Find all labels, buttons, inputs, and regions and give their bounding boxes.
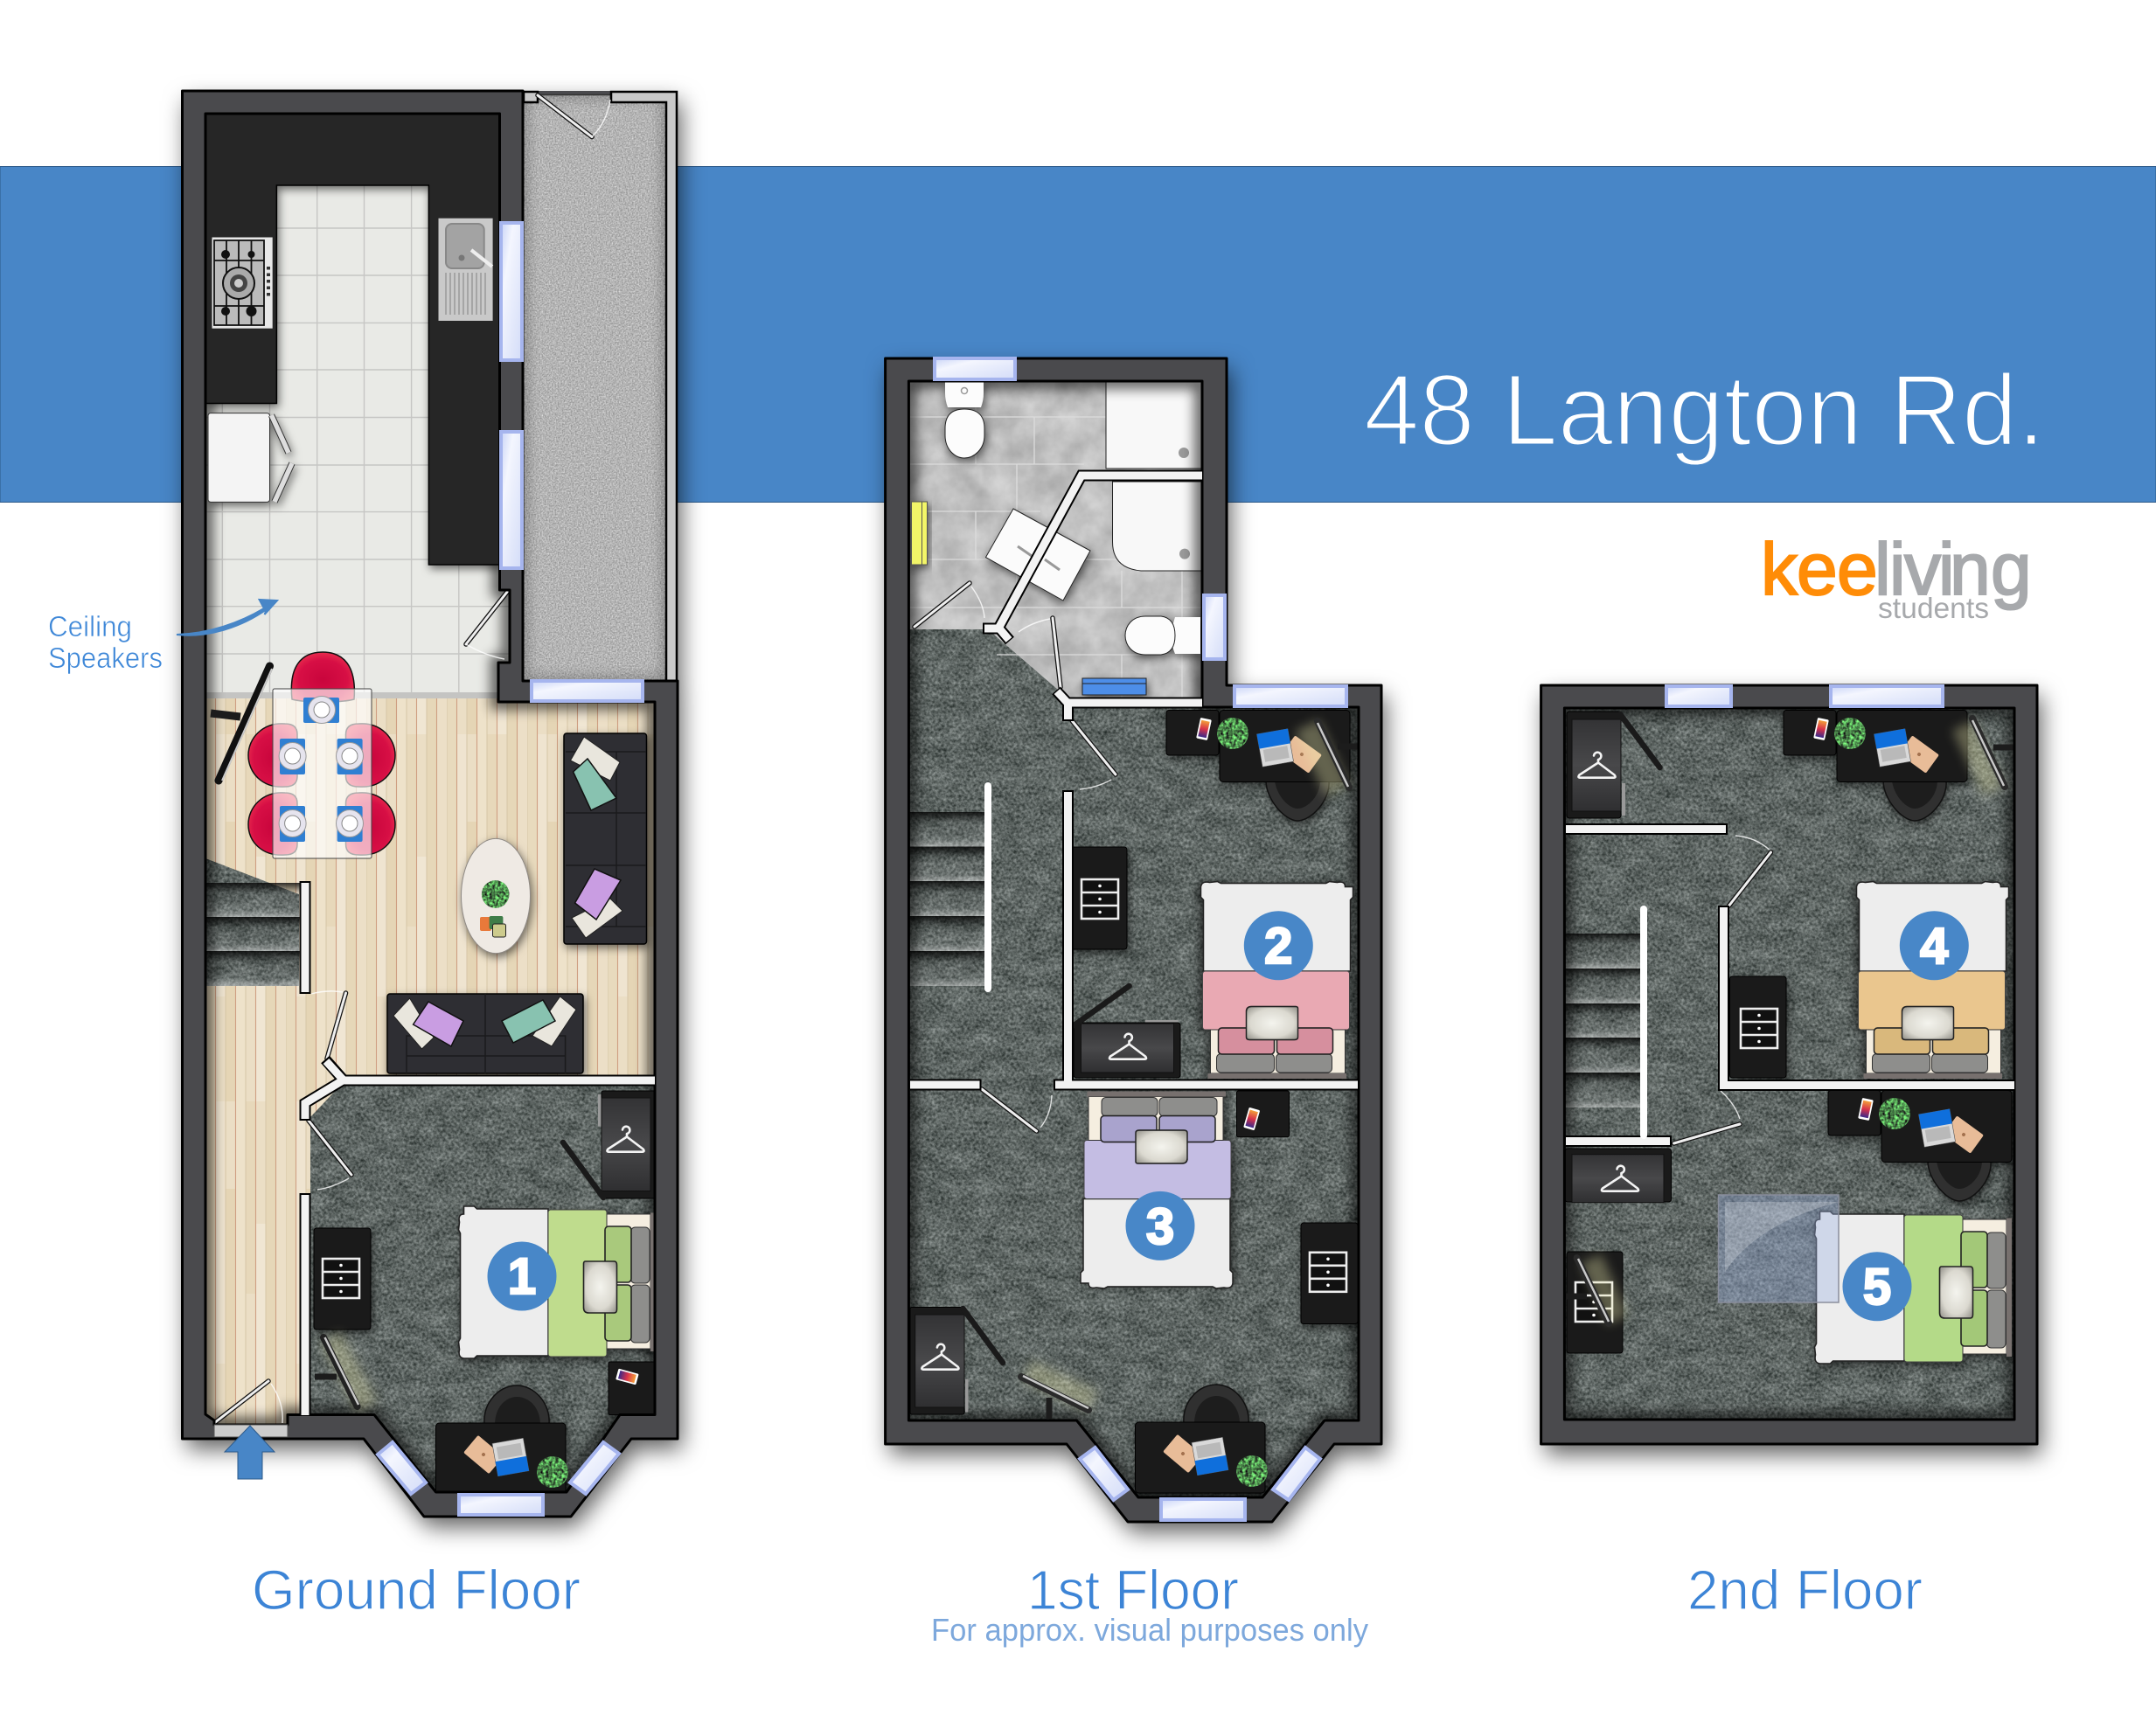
drawers: room 2 (1070, 847, 1127, 949)
callout: ceiling speakers: Speakers (48, 642, 163, 674)
toilet lower (1125, 616, 1200, 655)
building silhouette with drop shadow (1541, 685, 2037, 1444)
interior walls: ground floor (305, 881, 655, 1415)
drawers: room 4 (1729, 976, 1786, 1078)
room number badge 4: 4 (1920, 918, 1948, 975)
blue title banner (0, 166, 2156, 502)
gas hob (212, 238, 273, 329)
bedroom 1 carpet (310, 1084, 655, 1492)
windows: first floor (935, 358, 1346, 1520)
logo: keeliving students: kee (1761, 528, 1878, 610)
room number badge 5: 5 (1863, 1259, 1891, 1316)
yellow radiator (911, 502, 927, 565)
study desk: room 1 (435, 1385, 568, 1494)
wardrobe: room 1 (563, 1091, 656, 1198)
heading: 2nd floor: 2nd Floor (1687, 1559, 1923, 1621)
place settings (279, 696, 364, 842)
inner wall shadow (908, 381, 1359, 1497)
first floor outer walls (886, 358, 1381, 1522)
doors: first floor (915, 583, 1116, 1131)
drawers with lamp: room 5 (1565, 1252, 1623, 1353)
bedside table: room 1 (609, 1362, 656, 1415)
dining table (273, 689, 372, 858)
heading: 1st floor: 1st Floor (1027, 1559, 1239, 1621)
floor lamp: room 3 (1021, 1371, 1093, 1419)
logo: keeliving students: students (1878, 592, 1989, 624)
fridge (208, 413, 292, 502)
doors: second floor (1674, 836, 1771, 1143)
logo: keeliving students: living (1874, 528, 2032, 610)
wardrobe: room 3 (910, 1308, 1003, 1414)
carpet (910, 629, 1357, 1496)
double basin (986, 509, 1090, 601)
panel: second floor plan (1541, 685, 2037, 1444)
heading: ground floor: Ground Floor (252, 1559, 581, 1621)
ceiling speakers pointer arrow (177, 600, 277, 635)
inner wall shadow (206, 404, 654, 1490)
room number badge 4 (1900, 911, 1969, 980)
floor lamp: room 1 (315, 1337, 367, 1406)
bed 3 (1081, 1091, 1233, 1288)
floor lamp: room 2 (1307, 721, 1359, 791)
bathroom floor (909, 381, 1202, 698)
bedside table: room 3 (1236, 1091, 1289, 1137)
room number badge 2 (1244, 911, 1313, 980)
panel: first floor plan (886, 358, 1381, 1522)
doors: ground floor (214, 95, 610, 1423)
disclaimer note: For approx. visual purposes only (931, 1612, 1368, 1648)
callout: ceiling speakers (48, 610, 163, 674)
bed 4 (1857, 881, 2009, 1079)
room number badge 5 (1843, 1252, 1911, 1321)
room number badge 3 (1126, 1191, 1194, 1260)
interior walls: first floor (910, 476, 1358, 1085)
coffee table (462, 838, 530, 954)
toilet top (945, 383, 984, 458)
bed 1 (458, 1206, 656, 1358)
wardrobe: room 5 (1565, 1149, 1672, 1203)
study desk: room 2 (1166, 710, 1350, 821)
sofa: lower wall (387, 994, 583, 1073)
carpet (1564, 708, 2014, 1420)
entrance arrow (225, 1426, 275, 1479)
mirror by dining table (211, 666, 272, 781)
blue bathroom mat (1082, 678, 1146, 695)
wardrobe: room 2 (1074, 986, 1180, 1078)
stair rail: first floor (984, 786, 991, 989)
title: 48 Langton Rd. (1364, 353, 2045, 467)
kitchen tile floor (205, 114, 655, 1492)
windows: ground floor (378, 223, 643, 1515)
callout: ceiling speakers: Ceiling (48, 610, 132, 642)
glass panel (1719, 1195, 1839, 1302)
panel: ground floor plan (177, 91, 678, 1517)
stairs (1565, 934, 1640, 1107)
drawers: room 3 (1301, 1223, 1358, 1323)
ground floor outer walls (182, 91, 678, 1517)
logo: keeliving students (1761, 528, 2032, 624)
kitchen worktop (205, 114, 500, 565)
interior walls: second floor (1566, 829, 2014, 1142)
room number badge 1 (488, 1241, 556, 1311)
room number badge 1: 1 (508, 1248, 536, 1305)
ground floor stairs (205, 858, 300, 986)
courtyard gravel (524, 94, 666, 681)
wood floor (205, 698, 655, 1424)
study desk: room 3 (1135, 1385, 1268, 1493)
study desk: room 4 (1784, 710, 1967, 821)
study desk: room 5 (1828, 1091, 2012, 1201)
second floor outer walls (1541, 685, 2037, 1444)
front door threshold (214, 1425, 288, 1437)
dining chairs (248, 652, 395, 855)
floor lamp: room 4 (1963, 719, 2014, 791)
windows: second floor (1666, 686, 1943, 706)
kitchen sink (439, 219, 493, 321)
bed 2 (1201, 881, 1353, 1079)
wardrobe: room upper left (1567, 712, 1659, 818)
room number badge 2: 2 (1264, 918, 1292, 975)
stair rail: second floor (1640, 909, 1647, 1135)
sofa: right wall (564, 733, 647, 944)
bed 5 (1815, 1212, 2012, 1364)
inner wall shadow (1564, 708, 2014, 1420)
drawers: room 1 (314, 1228, 371, 1330)
building silhouette with drop shadow (886, 358, 1381, 1522)
courtyard light walls (510, 92, 677, 681)
room number badge 3: 3 (1146, 1198, 1174, 1255)
stairs (909, 812, 984, 986)
shower trays (1106, 382, 1202, 571)
building silhouette with drop shadow (182, 91, 678, 1517)
